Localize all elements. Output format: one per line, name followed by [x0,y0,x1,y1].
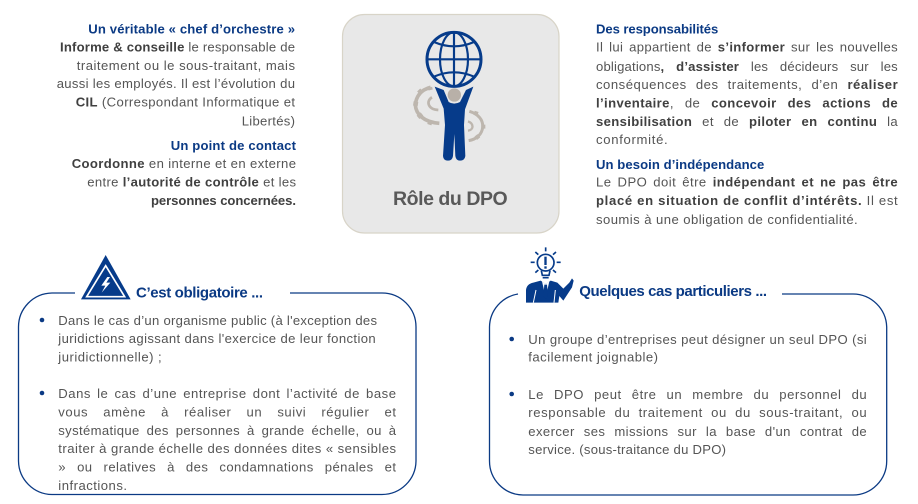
text: coordonne: entre l’autorité de contrôle et les [87,174,296,190]
bullet list: » ou relatives à des condamnations pénales et [58,460,396,475]
bullet list: Un groupe d’entreprises peut désigner un seul DPO (si [528,332,867,347]
text block: left column [57,21,297,208]
panel outline [490,294,887,495]
bullet list: Le DPO peut être un membre du personnel du [528,387,867,402]
panel outline [18,293,416,494]
heading: point de contact: Un point de contact [171,138,297,153]
bullet list: service. (sous-traitance du DPO) [528,442,726,457]
panel: c'est obligatoire [18,255,416,494]
icon: businessman with light bulb head [526,247,574,303]
text: responsabilités [596,40,898,147]
panel: role du DPO [342,14,559,233]
bullet list [40,313,397,493]
heading: Quelques cas particuliers ... [579,283,767,300]
text: responsabilités: conformité. [596,132,668,147]
text: coordonne: Coordonne en interne et en externe [72,156,296,171]
text: informe et conseille: Libertés) [242,114,295,128]
bullet list: juridictions agissant dans l'exercice de leur fonction [57,331,376,346]
icon: person [435,87,473,161]
text: informe et conseille [57,40,295,128]
text: responsabilités: sensibilisation et de piloter en continu la [596,114,898,129]
panel: quelques cas particuliers [490,247,887,495]
icon: person holding globe with gears [413,32,485,161]
text: indépendance: Le DPO doit être indépendant et ne pas être [596,175,898,190]
bullet list: infractions. [58,478,127,493]
text: indépendance: soumis à une obligation de confidentialité. [596,212,858,227]
icon: gears [413,87,485,141]
text: informe et conseille: CIL (Correspondant Informatique et [76,94,295,110]
text: coordonne [72,156,296,208]
text: informe et conseille: Informe & conseille le responsable de [60,40,295,54]
panel title: Rôle du DPO [393,188,508,210]
heading: indépendance: Un besoin d’indépendance [596,157,764,172]
text: indépendance [596,175,898,227]
bullet list: systématique des personnes à grande échelle, ou à [58,423,397,438]
bullet list: traiter à grande échelle des données dites « sensibles [58,441,396,456]
text: responsabilités: Il lui appartient de s’informer sur les nouvelles [596,40,898,55]
heading: responsabilités: Des responsabilités [596,21,718,36]
bullet list: juridictionnelle) ; [57,350,162,365]
heading: C’est obligatoire ... [136,284,263,302]
text block: right column [596,21,898,227]
text: informe et conseille: aussi les employés. Il est l’évolution du [57,76,295,91]
heading: chef d'orchestre: Un véritable « chef d’orchestre » [88,21,295,36]
icon: globe [427,32,481,86]
bullet list: Dans le cas d’une entreprise dont l’activité de base [58,386,396,401]
bullet list [509,332,867,457]
text: coordonne: personnes concernées. [151,193,296,208]
bullet list: exercer ses missions sur la base d'un contrat de [528,424,867,439]
text: informe et conseille: traitement ou le sous-traitant, mais [77,58,295,73]
bullet list: vous amène à réaliser un suivi régulier et [58,405,396,420]
bullet list: facilement joignable) [528,350,658,365]
bullet list: responsable du traitement ou du sous-traitant, ou [528,405,867,420]
icon: warning triangle [81,255,131,299]
text: indépendance: placé en situation de conflit d’intérêts. Il est [596,193,898,208]
text: responsabilités: l’inventaire, de concevoir des actions de [596,96,898,110]
bullet list: Dans le cas d’un organisme public (à l'exception des [58,313,377,328]
text: responsabilités: conséquences des traitements, d’en réaliser [596,77,898,92]
text: responsabilités: obligations, d’assister les décideurs sur les [596,59,898,74]
